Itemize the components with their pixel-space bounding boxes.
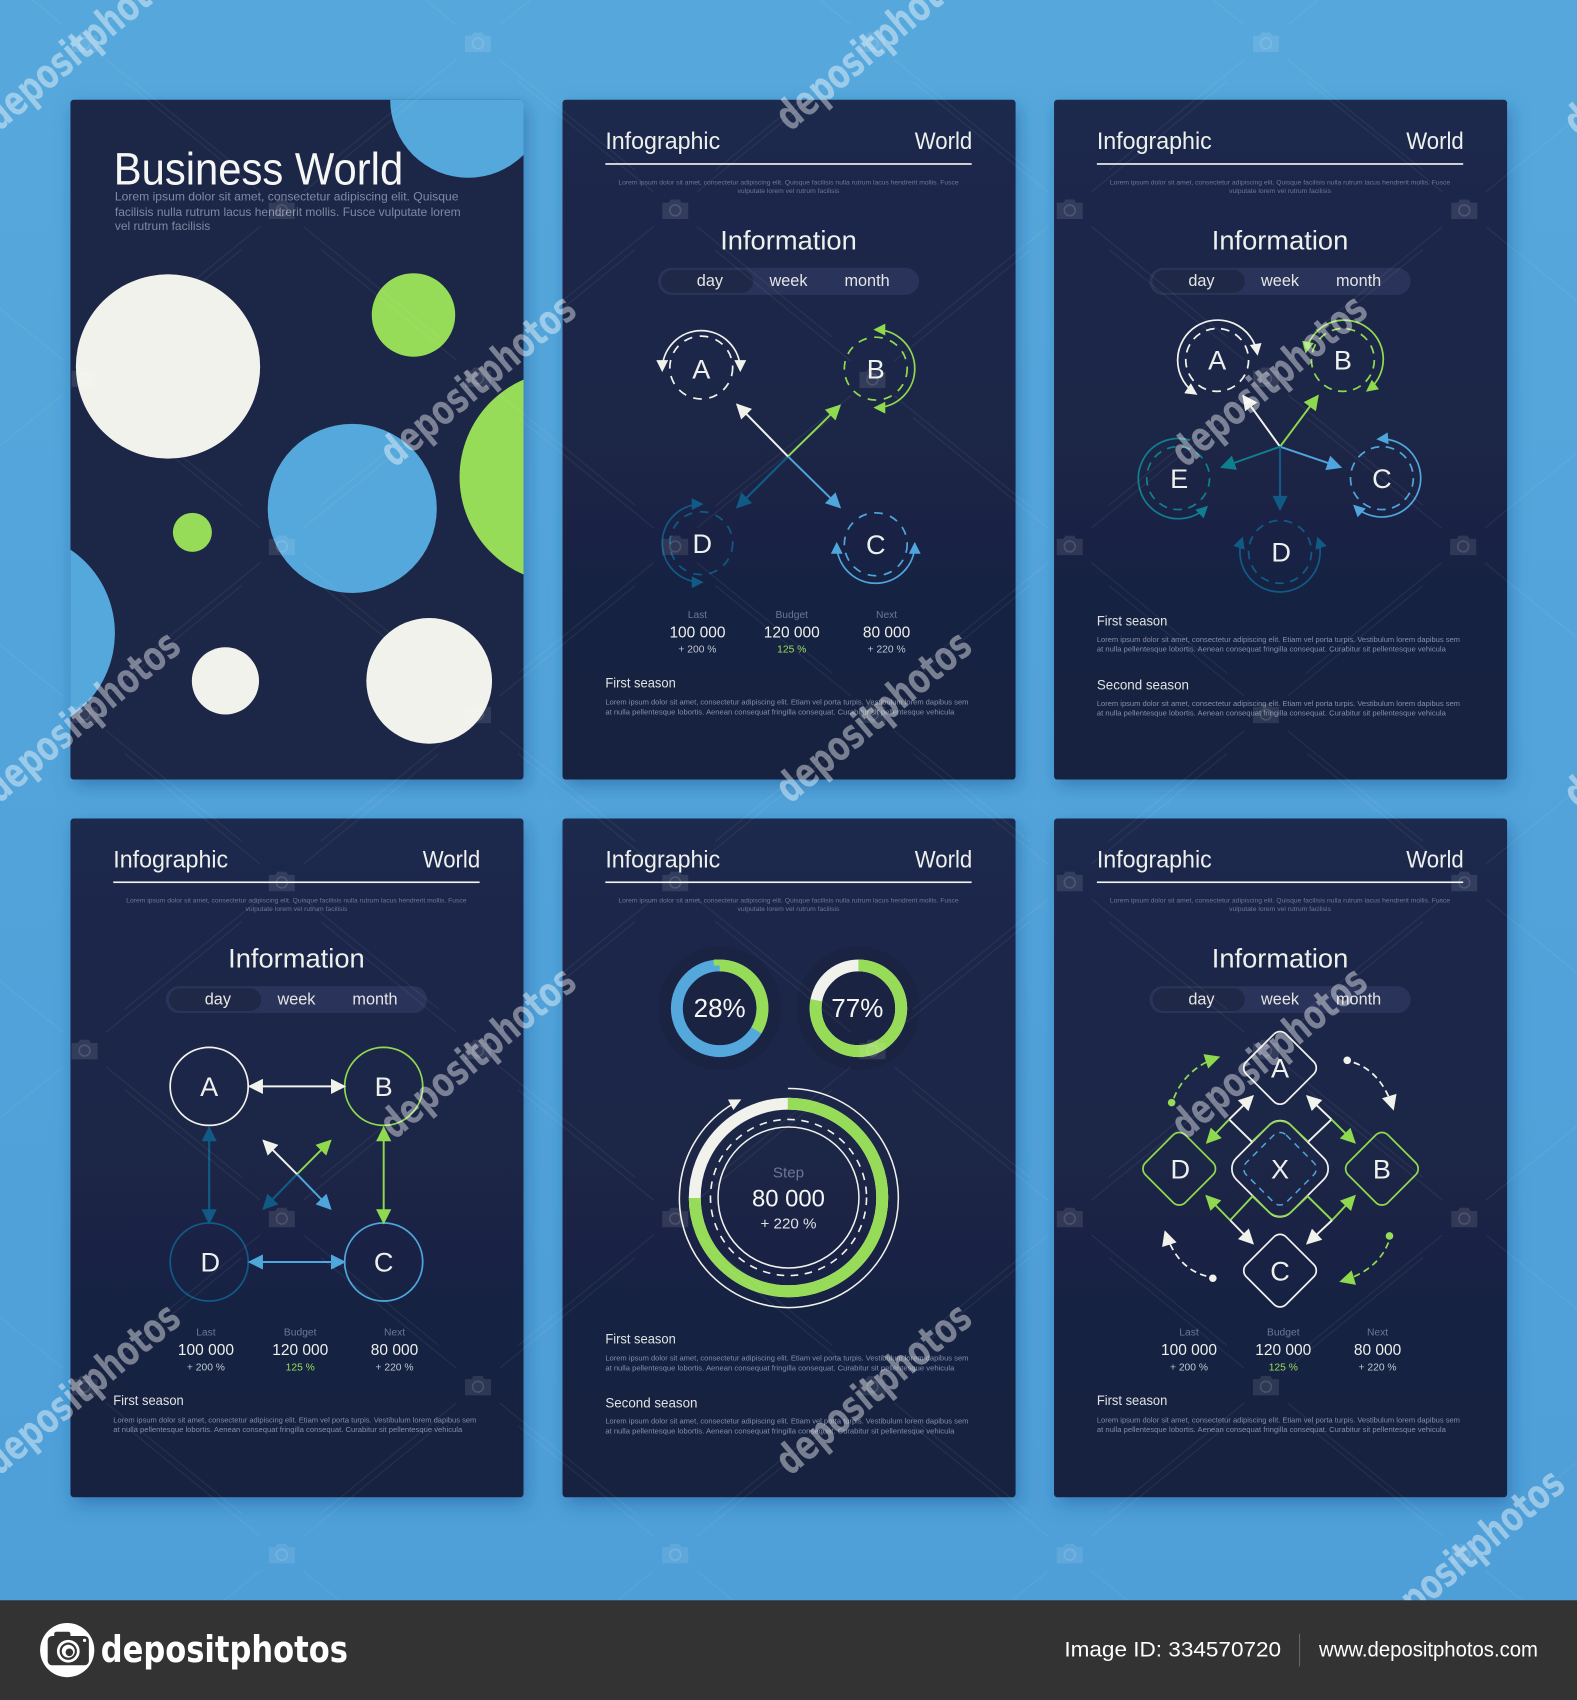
text block: seasons: First season	[1097, 614, 1167, 629]
cover intro text	[115, 190, 461, 233]
watermark overlay: depositphotos	[766, 621, 981, 812]
node A: A	[692, 353, 711, 384]
header	[113, 846, 480, 1013]
node B	[844, 330, 915, 408]
text block: seasons: at nulla pellentesque lobortis. Aenean consequat fringilla consequat. Curabitur sit pellentesque vehicula	[605, 1428, 954, 1435]
cover circles	[70, 100, 524, 744]
stats	[178, 1328, 419, 1373]
stats: 80 000	[1354, 1342, 1402, 1359]
stats: 125 %	[777, 645, 806, 656]
node E: E	[1170, 463, 1188, 494]
website: www.depositphotos.com	[1318, 1637, 1538, 1662]
text block: seasons	[605, 1331, 969, 1435]
text block: seasons: Second season	[605, 1395, 697, 1410]
node A	[1178, 320, 1257, 394]
header: Infographic	[1097, 846, 1212, 873]
text block: seasons: Lorem ipsum dolor sit amet, consectetur adipiscing elit. Etiam vel porta turpis. Vestibulum lorem dapibus sem	[605, 1356, 969, 1363]
header: vulputate lorem vel rutrum facilisis	[738, 188, 840, 195]
text block: first season: Lorem ipsum dolor sit amet, consectetur adipiscing elit. Etiam vel porta turpis. Vestibulum lorem dapibus sem	[113, 1417, 476, 1424]
big step ring: + 220 %	[760, 1215, 817, 1232]
text block: first season: First season	[605, 675, 676, 690]
stats: 125 %	[1269, 1362, 1298, 1373]
node B	[345, 1047, 423, 1125]
node C: C	[374, 1247, 393, 1278]
cover intro text: vel rutrum facilisis	[115, 219, 210, 233]
node D: D	[693, 528, 712, 559]
stats: + 220 %	[376, 1362, 414, 1373]
header: day	[1188, 272, 1215, 290]
header: Infographic	[605, 128, 720, 155]
header: week	[276, 990, 316, 1008]
header: World	[423, 846, 480, 873]
text block: seasons: Lorem ipsum dolor sit amet, consectetur adipiscing elit. Etiam vel porta turpis. Vestibulum lorem dapibus sem	[605, 1419, 969, 1426]
stats: + 220 %	[1359, 1362, 1397, 1373]
header: day	[205, 990, 232, 1008]
stats: + 220 %	[868, 645, 906, 656]
watermark overlay: depositphotos	[370, 285, 585, 476]
header: Information	[228, 943, 365, 974]
header: vulputate lorem vel rutrum facilisis	[1229, 906, 1332, 913]
node B: B	[1334, 345, 1352, 376]
donut chart 28%	[658, 946, 781, 1070]
text block: first season: Lorem ipsum dolor sit amet, consectetur adipiscing elit. Etiam vel porta turpis. Vestibulum lorem dapibus sem	[605, 700, 969, 707]
connector arrows	[1206, 1096, 1355, 1244]
diagram: square of nodes	[170, 1047, 423, 1301]
stats: Next	[1367, 1328, 1388, 1339]
stats: 125 %	[286, 1362, 315, 1373]
stats: 100 000	[669, 624, 726, 642]
node E	[1138, 438, 1210, 519]
text block: seasons	[1097, 614, 1460, 718]
header: month	[1336, 990, 1381, 1008]
node B	[1306, 320, 1383, 391]
text block: seasons: Lorem ipsum dolor sit amet, consectetur adipiscing elit. Etiam vel porta turpis. Vestibulum lorem dapibus sem	[1097, 637, 1460, 644]
stats: + 200 %	[678, 645, 716, 656]
icon: camera logo	[40, 1623, 94, 1677]
stats: 80 000	[863, 624, 911, 642]
stats: 120 000	[764, 624, 820, 642]
stats: Last	[1179, 1328, 1199, 1339]
diagram: hub with five nodes	[1138, 320, 1421, 592]
text block: seasons: at nulla pellentesque lobortis. Aenean consequat fringilla consequat. Curabitur sit pellentesque vehicula	[605, 1365, 954, 1372]
donut chart 77%: 77%	[831, 993, 883, 1023]
header: vulputate lorem vel rutrum facilisis	[245, 906, 348, 913]
node D	[1240, 520, 1320, 592]
stats	[1161, 1328, 1402, 1373]
stats: Budget	[284, 1328, 317, 1339]
header: week	[1260, 272, 1300, 290]
header: World	[915, 846, 972, 873]
node D	[662, 504, 733, 582]
header: vulputate lorem vel rutrum facilisis	[738, 906, 840, 913]
node A: A	[200, 1071, 219, 1102]
diamond D	[1139, 1129, 1219, 1209]
watermark overlay: depositphotos	[1161, 957, 1376, 1148]
stats: 120 000	[272, 1342, 329, 1359]
panel: five nodes infographic	[1054, 100, 1507, 780]
header: month	[352, 990, 398, 1008]
stats: Last	[688, 610, 707, 621]
diamond B	[1342, 1129, 1422, 1209]
watermark overlay: depositphotos	[766, 1293, 981, 1484]
node C	[345, 1223, 423, 1301]
header: Information	[720, 224, 857, 255]
header: vulputate lorem vel rutrum facilisis	[1229, 188, 1332, 195]
stats: + 200 %	[187, 1362, 225, 1373]
header: Infographic	[1097, 128, 1212, 155]
diamond C: C	[1270, 1255, 1290, 1286]
donut chart 28%: 28%	[694, 993, 746, 1023]
big step ring: Step	[773, 1164, 804, 1181]
text block: first season: Lorem ipsum dolor sit amet, consectetur adipiscing elit. Etiam vel porta turpis. Vestibulum lorem dapibus sem	[1097, 1417, 1460, 1424]
diamond D: D	[1171, 1154, 1190, 1185]
stats: Budget	[775, 610, 808, 621]
node A: A	[1208, 345, 1227, 376]
diamond A	[1240, 1028, 1320, 1108]
text block: first season: First season	[113, 1393, 184, 1408]
stats	[669, 610, 911, 656]
node C: C	[866, 529, 886, 560]
stats: Next	[876, 610, 897, 621]
header: day	[1188, 990, 1215, 1008]
header	[605, 846, 972, 913]
node C	[1350, 439, 1421, 517]
header	[1097, 846, 1464, 1013]
cover intro text: facilisis nulla rutrum lacus hendrerit mollis. Fusce vulputate lorem	[115, 205, 461, 219]
text block: first season	[113, 1393, 476, 1434]
panel: diamond flow infographic	[1054, 819, 1507, 1497]
stats: 120 000	[1255, 1342, 1312, 1359]
header: month	[844, 272, 890, 290]
text block: first season: at nulla pellentesque lobortis. Aenean consequat fringilla consequat. Curabitur sit pellentesque vehicula	[605, 709, 954, 716]
cover title: Business World	[114, 143, 403, 194]
header: day	[697, 272, 724, 290]
watermark overlay: depositphotos	[1161, 285, 1376, 476]
node A	[170, 1047, 248, 1125]
dashed cycle arrows	[1165, 1057, 1393, 1282]
header: Infographic	[113, 846, 228, 873]
text block: seasons: at nulla pellentesque lobortis. Aenean consequat fringilla consequat. Curabitur sit pellentesque vehicula	[1097, 647, 1446, 654]
text block: seasons: at nulla pellentesque lobortis. Aenean consequat fringilla consequat. Curabitur sit pellentesque vehicula	[1097, 711, 1446, 718]
footer bar	[0, 1600, 1577, 1700]
header: Information	[1212, 943, 1348, 974]
diagram: diamonds around X	[1139, 1028, 1422, 1311]
stats: Next	[384, 1328, 405, 1339]
text block: seasons: First season	[605, 1331, 676, 1346]
diamond C	[1240, 1231, 1320, 1311]
header: month	[1336, 272, 1381, 290]
header: week	[769, 272, 808, 290]
header	[1097, 128, 1464, 295]
text block: first season	[605, 675, 969, 716]
header: week	[1260, 990, 1300, 1008]
header: Lorem ipsum dolor sit amet, consectetur adipiscing elit. Quisque facilisis nulla rutrum lacus hendrerit mollis. Fusce	[1110, 898, 1451, 905]
node C	[837, 513, 915, 583]
logo wordmark: depositphotos	[101, 1628, 348, 1671]
header	[605, 128, 972, 295]
diamond A: A	[1271, 1053, 1290, 1084]
diamond X: X	[1271, 1154, 1289, 1185]
stats: Last	[196, 1328, 216, 1339]
donut chart 77%	[797, 946, 920, 1070]
cover intro text: Lorem ipsum dolor sit amet, consectetur adipiscing elit. Quisque	[115, 190, 459, 204]
text block: first season	[1097, 1393, 1460, 1434]
stats: + 200 %	[1170, 1362, 1208, 1373]
text block: seasons: Second season	[1097, 678, 1189, 693]
image id: Image ID: 334570720	[1064, 1637, 1281, 1662]
text block: seasons: Lorem ipsum dolor sit amet, consectetur adipiscing elit. Etiam vel porta turpis. Vestibulum lorem dapibus sem	[1097, 701, 1460, 708]
header: Lorem ipsum dolor sit amet, consectetur adipiscing elit. Quisque facilisis nulla rutrum lacus hendrerit mollis. Fusce	[618, 898, 959, 905]
header: World	[1406, 128, 1464, 155]
header: Infographic	[605, 846, 720, 873]
big step ring	[679, 1089, 898, 1308]
node D: D	[200, 1247, 220, 1278]
panel: X arrows infographic	[563, 100, 1016, 780]
big step ring: 80 000	[752, 1186, 825, 1213]
panel: donut charts infographic	[563, 819, 1016, 1497]
stats: 100 000	[1161, 1342, 1217, 1359]
node C: C	[1372, 463, 1392, 494]
node B: B	[867, 353, 885, 384]
header: Lorem ipsum dolor sit amet, consectetur adipiscing elit. Quisque facilisis nulla rutrum lacus hendrerit mollis. Fusce	[1110, 179, 1451, 186]
watermark overlay: depositphotos	[370, 957, 585, 1148]
panel: square flow infographic	[70, 819, 523, 1497]
stats: 100 000	[178, 1342, 234, 1359]
node D: D	[1271, 537, 1291, 568]
diamond B: B	[1373, 1154, 1391, 1185]
header: World	[915, 128, 972, 155]
text block: first season: at nulla pellentesque lobortis. Aenean consequat fringilla consequat. Curabitur sit pellentesque vehicula	[113, 1427, 462, 1434]
header: World	[1406, 846, 1464, 873]
node D	[170, 1223, 248, 1301]
text block: first season: First season	[1097, 1393, 1167, 1408]
header: Information	[1212, 224, 1348, 255]
text block: first season: at nulla pellentesque lobortis. Aenean consequat fringilla consequat. Curabitur sit pellentesque vehicula	[1097, 1427, 1446, 1434]
diagram: four nodes with crossing arrows	[662, 330, 915, 583]
header: Lorem ipsum dolor sit amet, consectetur adipiscing elit. Quisque facilisis nulla rutrum lacus hendrerit mollis. Fusce	[618, 179, 959, 186]
panel: cover Business World	[66, 98, 534, 794]
diamond X	[1226, 1114, 1334, 1223]
node A	[662, 331, 740, 399]
stats: 80 000	[371, 1342, 419, 1359]
header: Lorem ipsum dolor sit amet, consectetur adipiscing elit. Quisque facilisis nulla rutrum lacus hendrerit mollis. Fusce	[126, 898, 467, 905]
stats: Budget	[1267, 1328, 1300, 1339]
node B: B	[375, 1071, 393, 1102]
